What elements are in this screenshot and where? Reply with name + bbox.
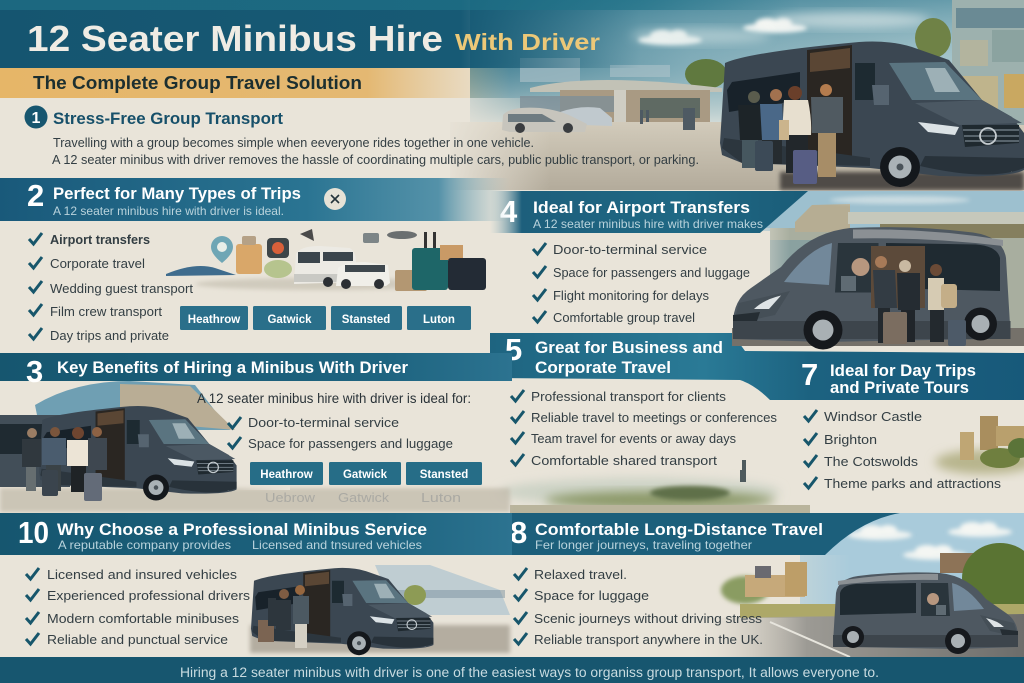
faded airport labels: Uebrow (265, 491, 316, 505)
door interior and passengers (871, 246, 966, 346)
panel 3: key benefits (0, 353, 512, 512)
band 4 (490, 191, 808, 233)
checklist 3: Space for passengers and luggage (248, 436, 453, 451)
silver cars (502, 107, 612, 133)
number 7: 7 (801, 357, 818, 392)
landscape: panel 5 scenery (500, 460, 810, 513)
airport buttons row: Stansted (342, 314, 390, 326)
checklist 10: Modern comfortable minibuses (47, 611, 240, 626)
checklist 7: Brighton (824, 432, 877, 447)
subheading 10: A reputable company provides (58, 538, 231, 552)
airport buttons row: Luton (423, 314, 455, 326)
number 4: 4 (500, 194, 518, 229)
heading 7: and Private Tours (830, 379, 969, 397)
subheading 10: Licensed and tnsured vehicles (252, 538, 422, 552)
faded airport labels: Luton (421, 491, 461, 505)
checklist 3: Door-to-terminal service (248, 415, 399, 430)
van side view (733, 227, 1010, 350)
heading 7 (830, 362, 976, 397)
checklist 4: Flight monitoring for delays (553, 288, 709, 303)
photo badge (267, 238, 289, 258)
footer banner (0, 657, 1024, 683)
small icons (300, 229, 417, 243)
checklist 8: Relaxed travel. (534, 567, 627, 582)
checklist 5 (511, 389, 778, 468)
tan suitcase (236, 244, 262, 274)
checklist 2: Film crew transport (50, 304, 162, 319)
airport buttons row: Gatwick (343, 469, 388, 481)
number 8: 8 (510, 515, 527, 550)
airport buttons row: Stansted (420, 469, 468, 481)
title banner (0, 0, 800, 68)
subheading 2: A 12 seater minibus hire with driver is ideal. (53, 204, 284, 218)
checklist 8 (514, 567, 763, 647)
checklist 5: Team travel for events or away days (531, 431, 736, 446)
subtitle ribbon (0, 68, 510, 98)
map pin (211, 236, 233, 263)
panel 5: business and corporate travel (490, 332, 1024, 468)
illustration: castle on hill (935, 416, 1024, 474)
icon: cross badge (324, 188, 346, 210)
airport buttons row: Heathrow (188, 314, 240, 326)
band 3 (0, 353, 512, 381)
faded airport labels (265, 491, 461, 505)
checklist 10: Licensed and insured vehicles (47, 567, 238, 582)
white van small (336, 262, 390, 289)
heading 3: Key Benefits of Hiring a Minibus With Driver (57, 359, 409, 377)
band 5 (490, 333, 1024, 400)
heading 2: Perfect for Many Types of Trips (53, 185, 301, 203)
faded airport labels: Gatwick (338, 491, 390, 505)
number 10: 10 (18, 515, 49, 550)
number badge 1 (24, 106, 48, 128)
heading 5: Corporate Travel (535, 359, 671, 377)
terminal building (520, 58, 722, 122)
checklist 2: Wedding guest transport (50, 281, 193, 296)
checklist 5: Professional transport for clients (531, 389, 727, 404)
airport buttons row (180, 306, 471, 330)
checklist 7: The Cotswolds (824, 454, 919, 469)
panel 7: day trips and tours (801, 357, 1024, 491)
hero minibus (720, 42, 1024, 187)
checklist 5: Reliable travel to meetings or conferences (531, 410, 778, 425)
photo: countryside road and van (690, 513, 1024, 657)
hero photo: minibus at terminal (440, 0, 1024, 190)
body text 1 (52, 135, 699, 167)
checklist 8: Reliable transport anywhere in the UK. (534, 632, 763, 647)
checklist 5: Comfortable shared transport (531, 453, 717, 468)
checklist 10 (26, 567, 251, 647)
band 8 (510, 513, 900, 555)
checklist 7: Theme parks and attractions (824, 476, 1002, 491)
passengers boarding (738, 84, 843, 184)
title: 12 Seater Minibus Hire (27, 18, 443, 59)
heading 5: Great for Business and (535, 339, 723, 357)
heading 5 (535, 339, 723, 377)
panel 2: many types of trips (0, 178, 510, 343)
subtitle ribbon: The Complete Group Travel Solution (33, 73, 362, 93)
checklist 7: Windsor Castle (824, 409, 922, 424)
airport buttons row (250, 462, 482, 485)
band 2 (0, 178, 510, 221)
checklist 4: Door-to-terminal service (553, 242, 707, 257)
plant (264, 260, 292, 278)
car (166, 266, 236, 276)
number 5: 5 (505, 332, 522, 367)
van side view (833, 572, 1018, 654)
subheading 10 (58, 538, 422, 552)
subheading 4: A 12 seater minibus hire with driver makes (533, 217, 763, 231)
number 2: 2 (27, 178, 44, 213)
number badge 1: 1 (32, 110, 41, 127)
checklist 4 (533, 242, 750, 325)
number 3: 3 (26, 354, 43, 389)
photo: van with passengers (0, 381, 510, 512)
title accent: With Driver (455, 29, 600, 55)
checklist 4: Comfortable group travel (553, 310, 695, 325)
heading 10: Why Choose a Professional Minibus Service (57, 521, 427, 539)
heading 7: Ideal for Day Trips (830, 362, 976, 380)
footer banner: Hiring a 12 seater minibus with driver is one of the easiest ways to organiss group transport, It allows everyone to. (180, 665, 879, 680)
body text 1: Travelling with a group becomes simple when eeveryone rides together in one vehicle. (53, 135, 534, 150)
checklist 4: Space for passengers and luggage (553, 265, 750, 280)
airport buttons row: Heathrow (260, 469, 313, 481)
heading 1: Stress-Free Group Transport (53, 109, 283, 128)
checklist 2: Corporate travel (50, 256, 145, 271)
tree (915, 18, 951, 58)
intro line: A 12 seater minibus hire with driver is ideal for: (197, 391, 471, 406)
white minibus (294, 246, 356, 287)
checklist 2 (29, 232, 193, 343)
body text 1: A 12 seater minibus with driver removes the hassle of coordinating multiple cars, public public transport, or parking. (52, 152, 699, 167)
panel 8: long-distance travel (510, 513, 900, 647)
checklist 8: Scenic journeys without driving stress (534, 611, 763, 626)
photo: airport transfer van (732, 191, 1024, 350)
band 10 (0, 513, 512, 555)
checklist 3 (228, 415, 453, 451)
building right (952, 0, 1024, 125)
subheading 8: Fer longer journeys, traveling together (535, 538, 752, 552)
panel 1: stress-free group transport (24, 106, 699, 167)
pedestrians (640, 108, 695, 130)
panel 4: airport transfers (490, 191, 808, 325)
checklist 2: Airport transfers (50, 232, 150, 247)
airport buttons row: Gatwick (267, 314, 312, 326)
checklist 7 (804, 409, 1002, 491)
photo: terminal behind van (250, 565, 510, 655)
heading 8: Comfortable Long-Distance Travel (535, 521, 823, 539)
checklist 2: Day trips and private (50, 328, 169, 343)
luggage group (395, 232, 486, 291)
heading 4: Ideal for Airport Transfers (533, 199, 750, 217)
checklist 8: Space for luggage (534, 588, 649, 603)
illustration: travel icons, vans and luggage (166, 229, 486, 291)
checklist 10: Experienced professional drivers (47, 588, 251, 603)
checklist 10: Reliable and punctual service (47, 632, 228, 647)
panel 10: professional service (0, 513, 512, 655)
